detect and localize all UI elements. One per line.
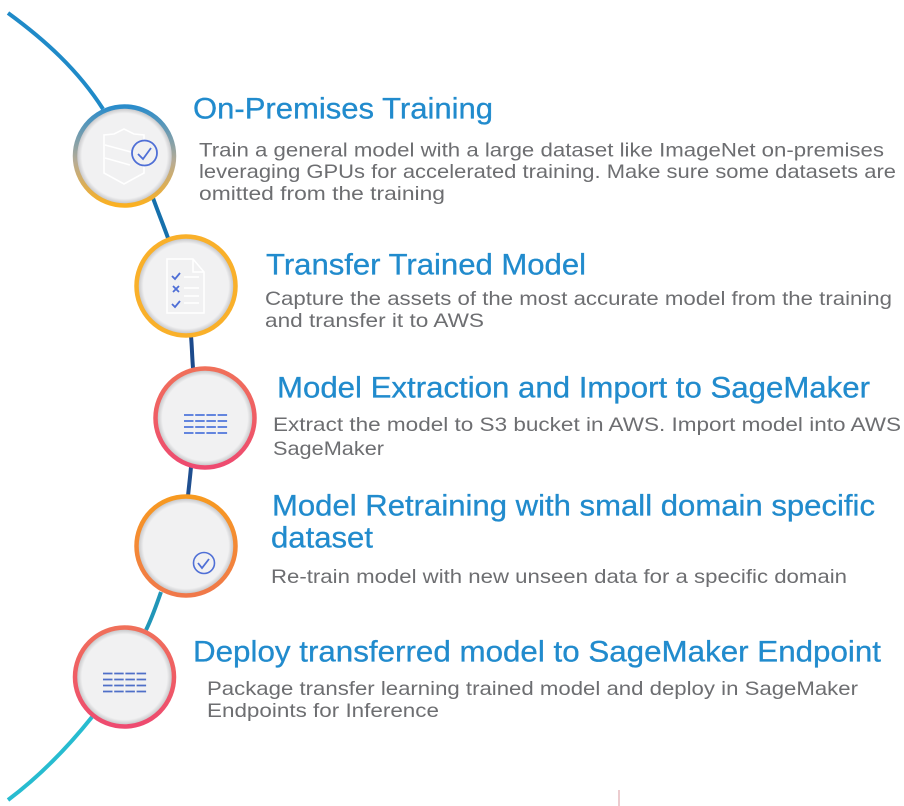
icon: shield with check xyxy=(104,129,157,184)
step 3 heading: Model Extraction and Import to SageMaker xyxy=(277,372,870,404)
step 5 description: Endpoints for Inference xyxy=(207,700,439,722)
icon: data grid xyxy=(103,674,146,692)
step 5 description: Package transfer learning trained model and deploy in SageMaker xyxy=(207,678,859,700)
step 2 description: Capture the assets of the most accurate model from the training xyxy=(265,288,892,310)
icon: checklist document xyxy=(167,259,204,313)
step 1 description: omitted from the training xyxy=(199,183,445,205)
step 5 node xyxy=(75,628,174,726)
step 5 description xyxy=(207,678,859,722)
step 1 node xyxy=(75,106,174,206)
step 1 description xyxy=(199,140,896,205)
timeline curve xyxy=(8,13,193,800)
step 4 heading xyxy=(271,490,875,554)
step 4 heading: Model Retraining with small domain specific xyxy=(272,490,875,522)
step 3 description: Extract the model to S3 bucket in AWS. Import model into AWS xyxy=(273,414,901,436)
step 4 heading: dataset xyxy=(271,522,373,554)
step 1 heading: On-Premises Training xyxy=(193,92,493,126)
step 2 description: and transfer it to AWS xyxy=(265,310,484,332)
step 2 node xyxy=(136,236,236,336)
step 1 description: leveraging GPUs for accelerated training. Make sure some datasets are xyxy=(199,161,896,183)
icon: check badge xyxy=(194,552,214,574)
step 3 description: SageMaker xyxy=(273,438,385,460)
step 4 node xyxy=(136,496,236,596)
step 4 description: Re-train model with new unseen data for a specific domain xyxy=(271,566,847,588)
step 3 description xyxy=(273,414,901,460)
step 5 heading: Deploy transferred model to SageMaker Endpoint xyxy=(193,636,881,668)
step 3 node xyxy=(156,368,254,468)
step 1 description: Train a general model with a large dataset like ImageNet on-premises xyxy=(199,140,884,162)
icon: data grid xyxy=(184,415,227,433)
step 2 description xyxy=(265,288,892,332)
step 2 heading: Transfer Trained Model xyxy=(266,248,586,282)
